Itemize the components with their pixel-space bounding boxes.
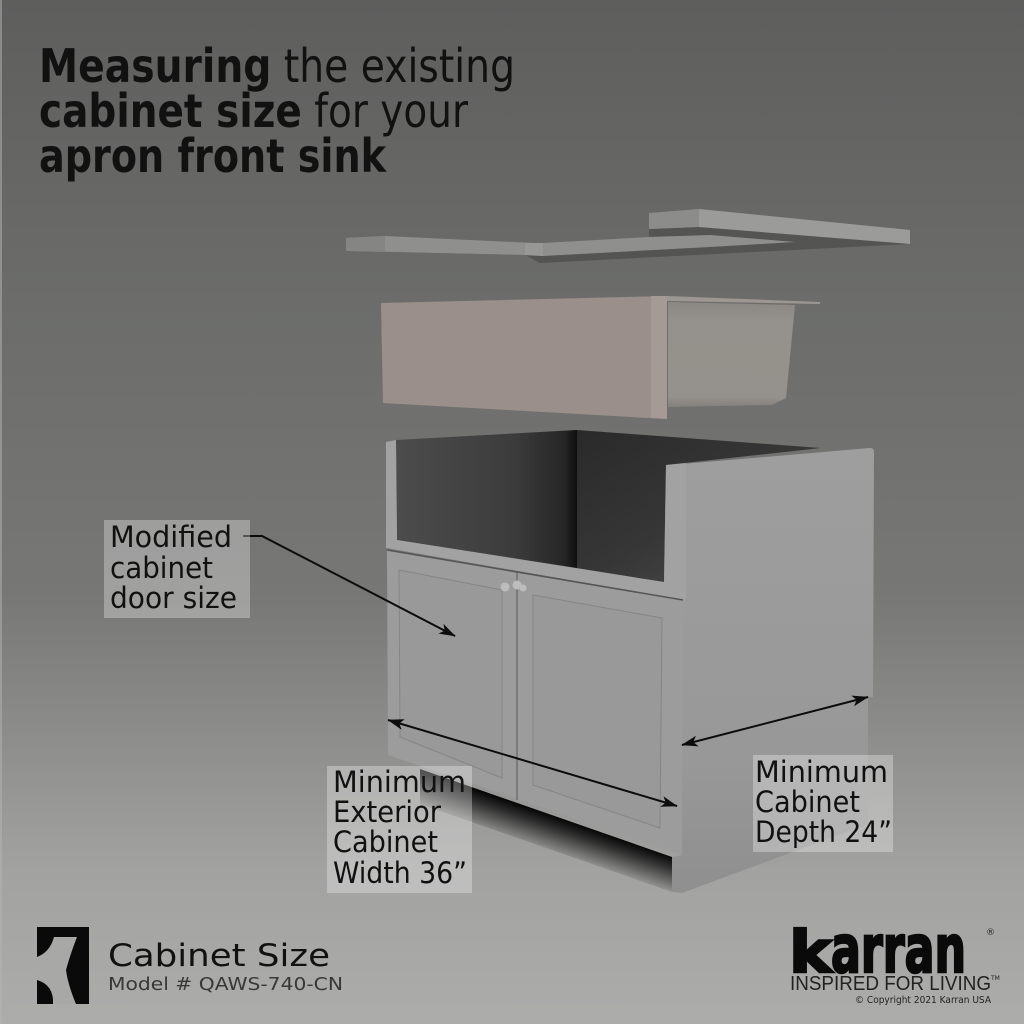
arrow: modified door [243,536,455,636]
callout: depth: Minimum [755,755,888,789]
arrow: width [388,720,677,806]
left door panel [399,570,502,778]
toe kick shadow [420,769,672,892]
title [39,39,515,183]
cabinet interior right wall [577,430,821,582]
countertop [346,209,910,263]
icon: R logo [37,927,89,1004]
karran logo: TM [990,975,1000,982]
callout: width: Width 36” [333,856,467,890]
footer title: Cabinet Size [108,938,330,974]
right door panel [533,595,662,828]
callout: width: Minimum [333,765,466,799]
footer title [108,938,343,995]
callout: width: Exterior [333,795,441,829]
callout: modified door: door size [110,581,237,615]
callout: depth: Cabinet [755,785,860,819]
karran logo: INSPIRED FOR LIVING [790,973,991,995]
karran logo: k [789,918,834,986]
title: cabinet size for your [39,84,468,138]
karran logo: ® [986,928,995,938]
callout: depth: Depth 24” [755,815,892,849]
cabinet interior left wall [396,430,577,568]
callout: modified door [104,520,250,618]
door frame [387,550,683,855]
callout: depth [753,755,893,852]
footer title: Model # QAWS-740-CN [108,974,343,995]
title: Measuring the existing [39,39,515,93]
karran logo: © Copyright 2021 Karran USA [855,995,991,1006]
callout: width: Cabinet [333,825,438,859]
callout: modified door: Modified [110,520,232,554]
cabinet [386,430,874,893]
apron frame [386,440,686,600]
callout: modified door: cabinet [110,551,213,585]
callout: width [327,765,472,893]
side panel [672,448,874,893]
title: apron front sink [39,129,387,183]
sink [381,296,820,419]
karran logo [789,911,1000,1006]
arrow: depth [682,697,868,745]
door knobs [500,580,526,592]
